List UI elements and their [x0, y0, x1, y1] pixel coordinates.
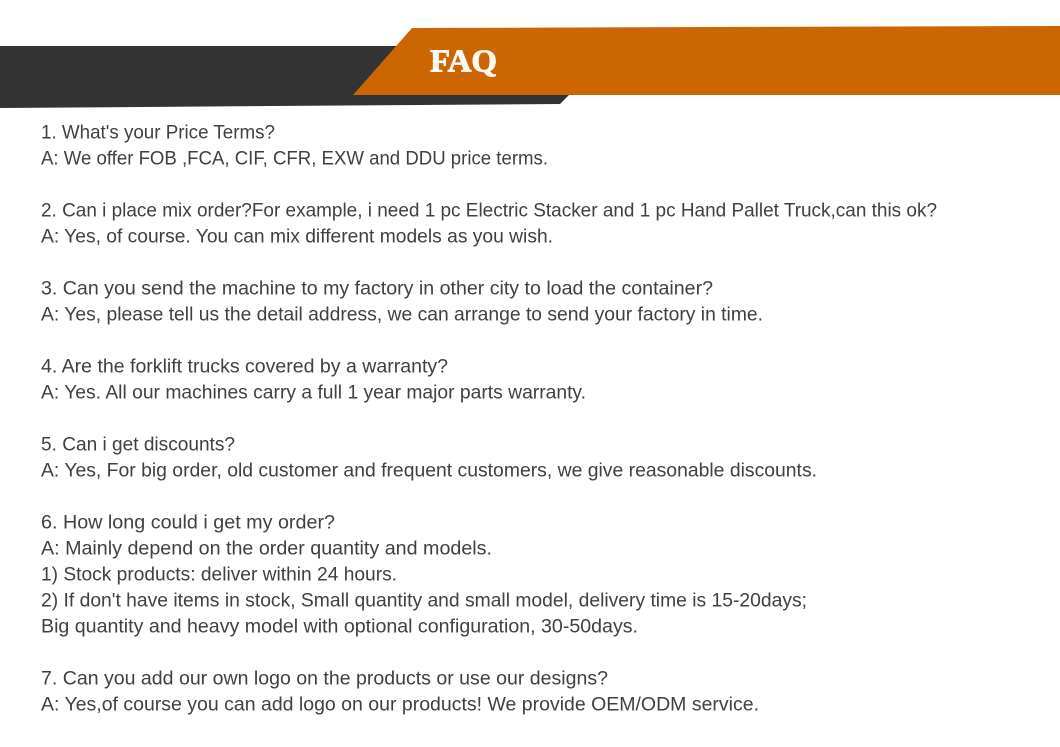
- text block: question 6: 2) If don't have items in stock, Small quantity and small model, delivery time is 15-20days;: [41, 590, 807, 612]
- text block: question 7: A: Yes,of course you can add logo on our products! We provide OEM/ODM service.: [41, 694, 759, 716]
- text block: question 7: 7. Can you add our own logo on the products or use our designs?: [41, 668, 608, 690]
- text block: question 6: [41, 512, 807, 638]
- text block: question 1: A: We offer FOB ,FCA, CIF, CFR, EXW and DDU price terms.: [41, 148, 548, 170]
- text block: question 1: 1. What's your Price Terms?: [41, 122, 275, 144]
- text block: question 6: 6. How long could i get my order?: [41, 512, 335, 534]
- text block: question 3: 3. Can you send the machine to my factory in other city to load the container?: [41, 278, 713, 300]
- text block: question 5: A: Yes, For big order, old customer and frequent customers, we give reasonable discounts.: [41, 460, 817, 482]
- text block: question 5: [41, 434, 817, 482]
- heading: FAQ: FAQ: [430, 42, 497, 78]
- text block: question 3: A: Yes, please tell us the detail address, we can arrange to send your factory in time.: [41, 304, 763, 326]
- text block: question 1: [41, 122, 548, 170]
- text block: question 6: A: Mainly depend on the order quantity and models.: [41, 538, 492, 560]
- text block: question 3: [41, 278, 763, 326]
- text block: question 2: [41, 200, 937, 248]
- text block: question 4: [41, 356, 586, 404]
- text block: question 2: 2. Can i place mix order?For example, i need 1 pc Electric Stacker and 1 pc Hand Pallet Truck,can this ok?: [41, 200, 937, 222]
- banner orange ribbon: [353, 26, 1060, 95]
- text block: question 4: A: Yes. All our machines carry a full 1 year major parts warranty.: [41, 382, 586, 404]
- text block: question 7: [41, 668, 759, 716]
- banner: FAQ header: [0, 26, 1060, 108]
- text block: question 5: 5. Can i get discounts?: [41, 434, 235, 456]
- banner dark stripe: [0, 46, 569, 108]
- text block: question 2: A: Yes, of course. You can mix different models as you wish.: [41, 226, 553, 248]
- text block: question 4: 4. Are the forklift trucks covered by a warranty?: [41, 356, 448, 378]
- text block: question 6: Big quantity and heavy model with optional configuration, 30-50days.: [41, 616, 638, 638]
- text block: question 6: 1) Stock products: deliver within 24 hours.: [41, 564, 397, 586]
